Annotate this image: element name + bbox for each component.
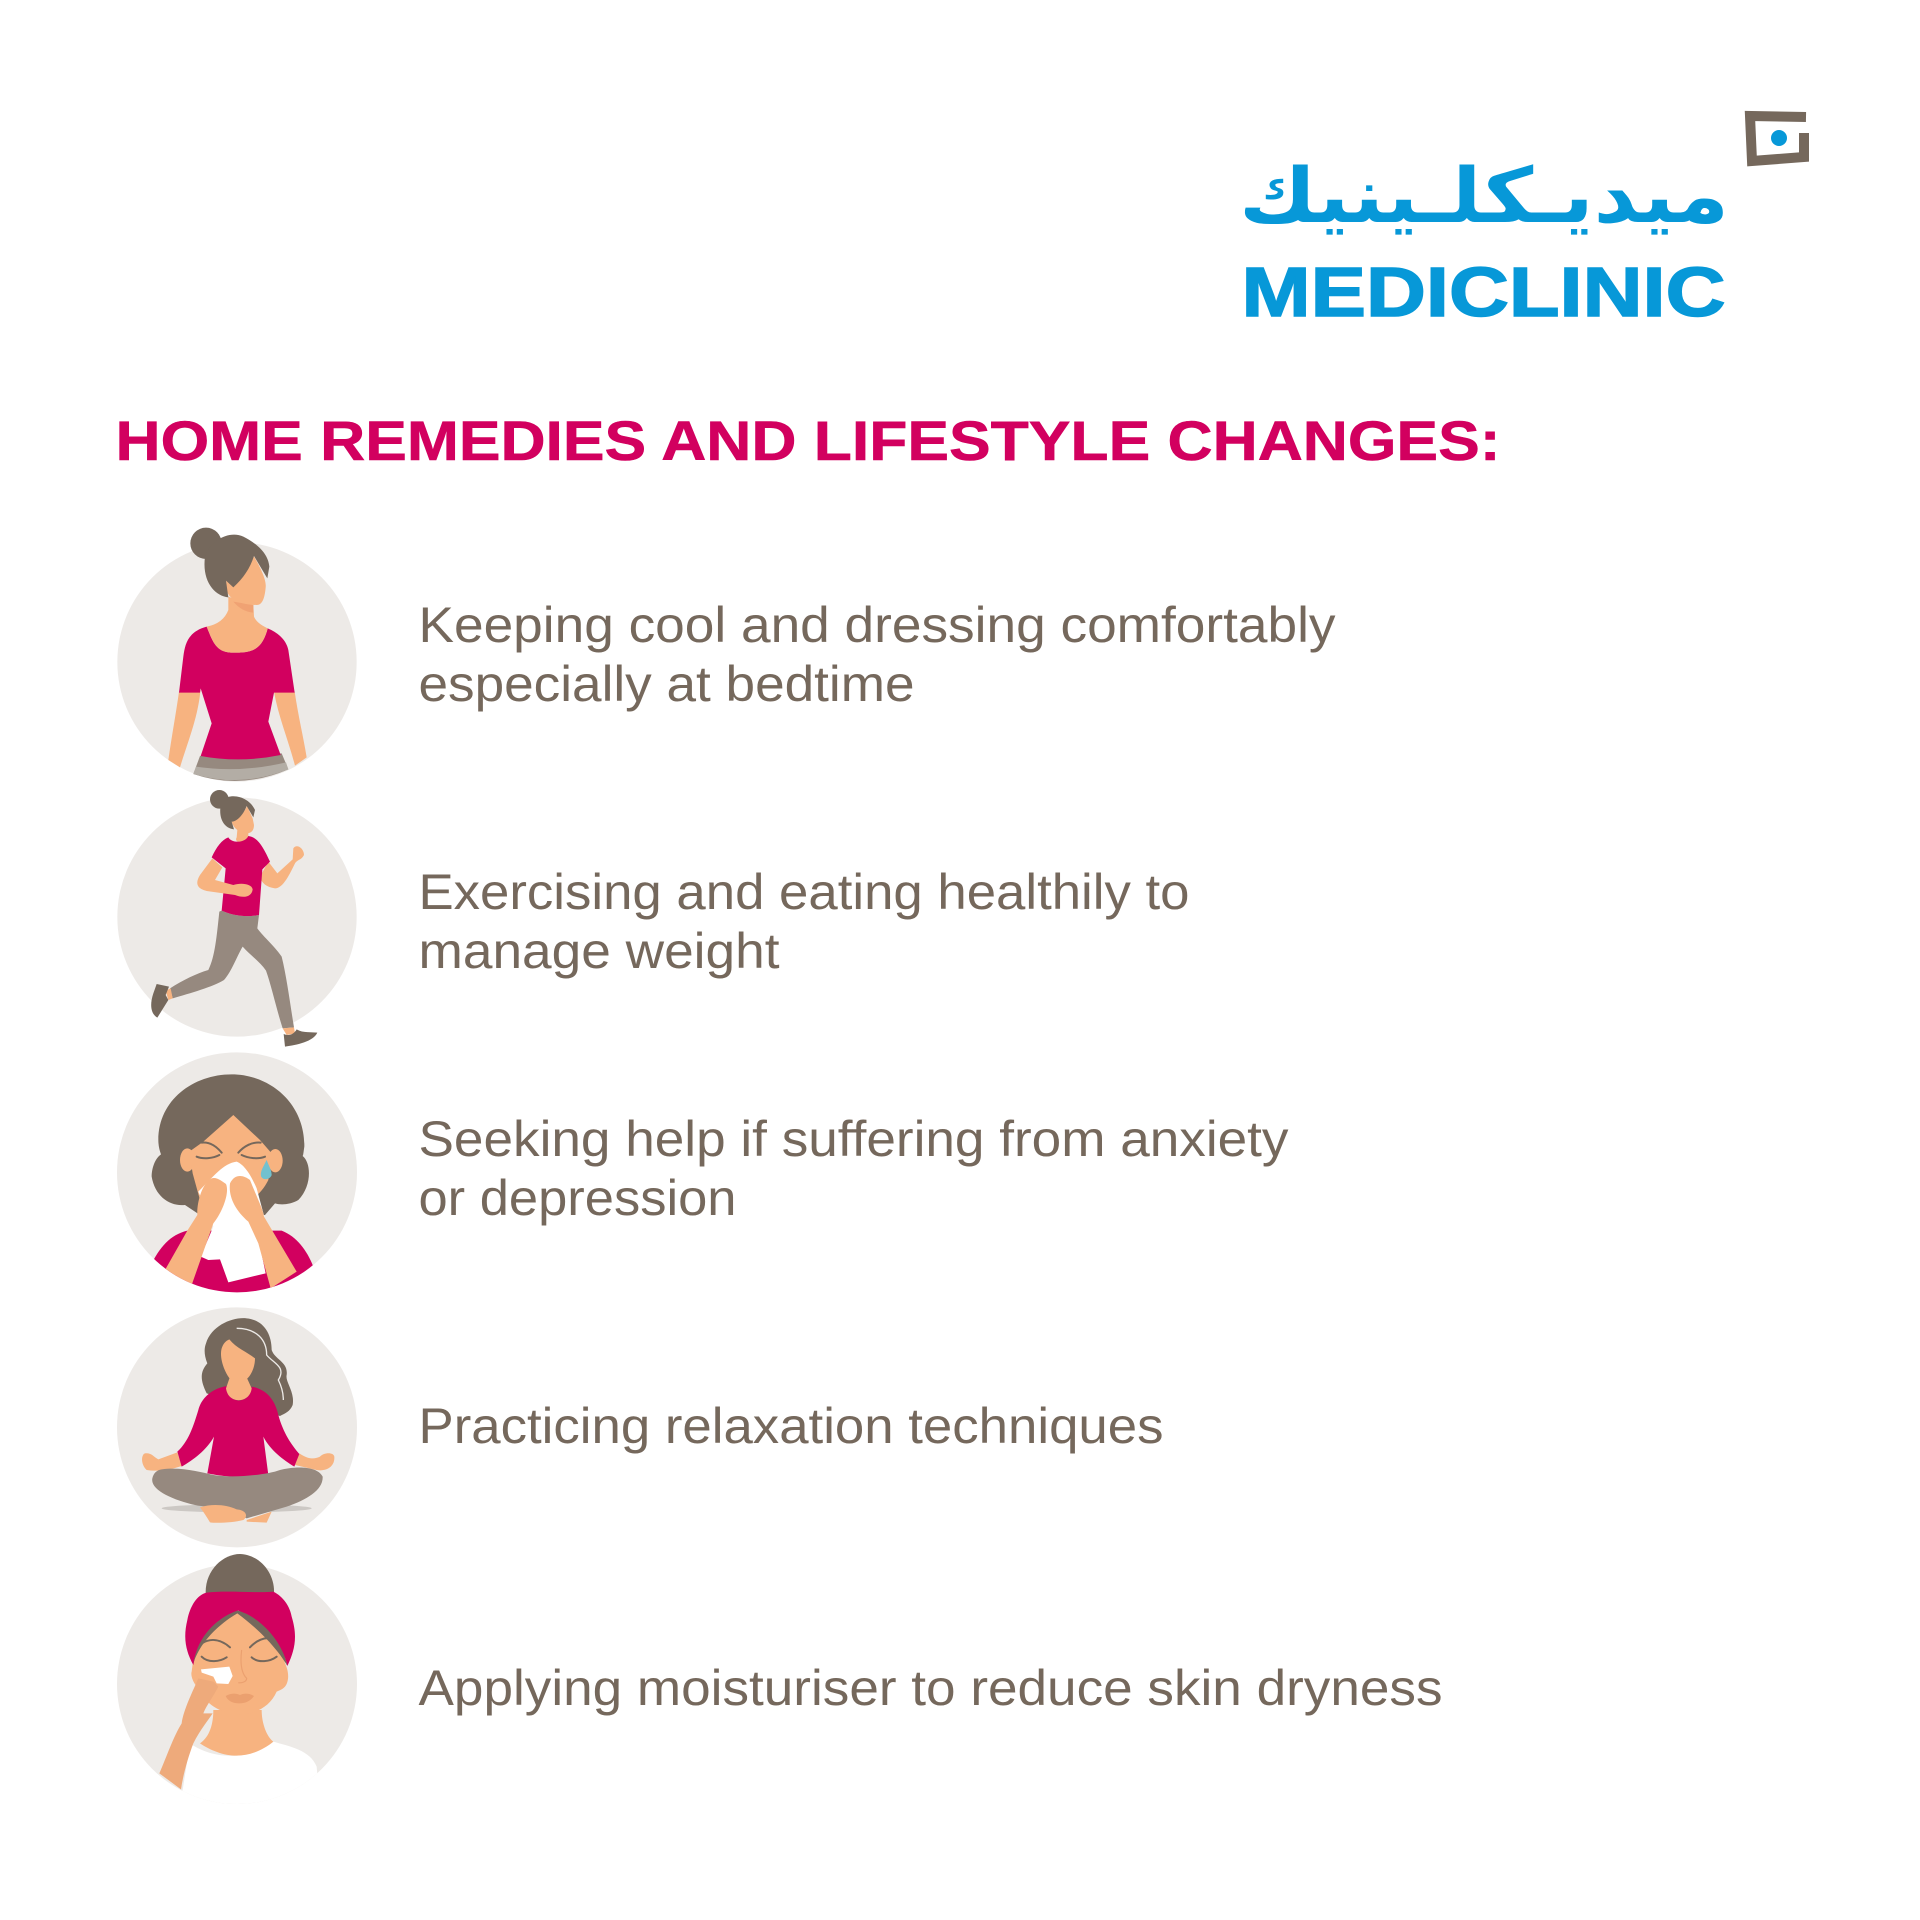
title: HOME REMEDIES AND LIFESTYLE CHANGES: — [116, 409, 1501, 472]
text: relaxation: Practicing relaxation techniques — [418, 1398, 1164, 1454]
text: exercising: manage weight — [418, 923, 780, 979]
text: keeping cool: Keeping cool and dressing comfortably — [418, 597, 1336, 653]
icon: woman standing in comfortable clothes — [117, 528, 357, 782]
icon: woman running — [117, 790, 357, 1047]
icon: woman applying moisturiser — [117, 1554, 357, 1807]
logo Arabic wordmark: ميديـكلـينيك — [1239, 151, 1729, 240]
logo Latin wordmark: MEDICLINIC — [1242, 253, 1726, 331]
text: moisturiser: Applying moisturiser to reduce skin dryness — [418, 1660, 1442, 1716]
text: seeking help: or depression — [418, 1170, 736, 1226]
logo: Mediclinic — [1239, 116, 1806, 331]
icon: woman crying into tissue — [117, 1052, 357, 1297]
text: keeping cool: especially at bedtime — [418, 656, 914, 712]
icon: woman meditating — [117, 1307, 357, 1547]
logo symbol — [1750, 116, 1806, 161]
text: seeking help: Seeking help if suffering from anxiety — [418, 1111, 1288, 1167]
text: exercising: Exercising and eating healthily to — [418, 864, 1190, 920]
